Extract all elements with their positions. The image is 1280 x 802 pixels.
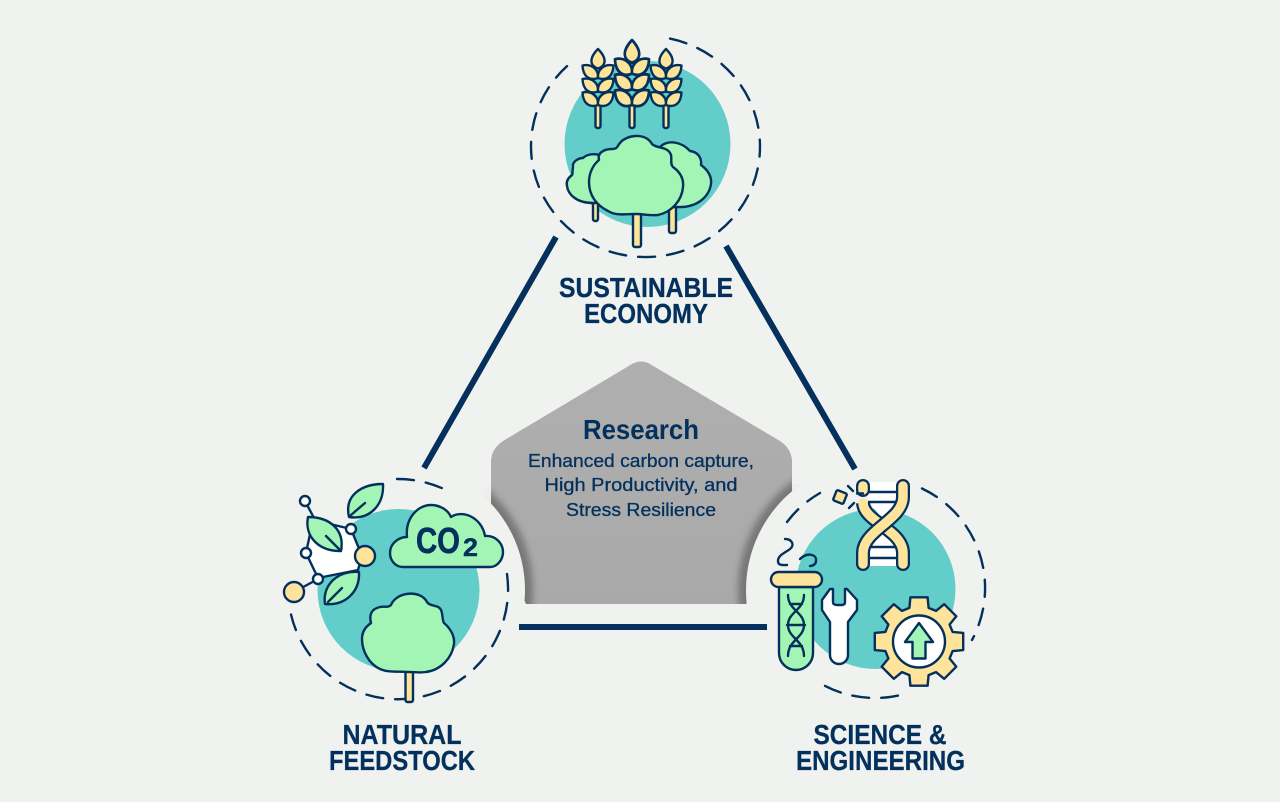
teal circle <box>564 61 730 227</box>
icon: CO2 cloud <box>390 505 503 567</box>
icon: wrench <box>822 589 857 664</box>
dashed ring <box>531 39 760 257</box>
dashed ring <box>787 488 985 698</box>
panel: sustainable economy icon <box>531 39 760 257</box>
faint halo shadows <box>267 457 1008 723</box>
panel: science and engineering icon <box>771 482 985 698</box>
research description line 3: Stress Resilience <box>566 500 716 520</box>
icon: wheat right <box>650 49 682 128</box>
label: natural feedstock <box>329 719 475 776</box>
central research pentagon <box>491 362 792 604</box>
icon: small square and sparks <box>833 486 863 508</box>
icon: wheat left <box>582 49 614 128</box>
label: natural feedstock: FEEDSTOCK <box>329 745 475 776</box>
label: sustainable economy <box>559 272 733 329</box>
icon: leaves <box>307 484 383 604</box>
line: sustainable economy to natural feedstock <box>424 237 556 468</box>
icon: DNA helix <box>863 482 903 566</box>
teal circle <box>318 509 480 671</box>
research description line 2: High Productivity, and <box>544 475 738 495</box>
icon: trees <box>567 136 711 247</box>
label: science and engineering: ENGINEERING <box>796 745 965 776</box>
teal circle <box>796 509 956 669</box>
line: natural feedstock to science and engineering <box>519 624 767 630</box>
icon: test tube <box>771 539 822 670</box>
label: natural feedstock: NATURAL <box>342 719 462 750</box>
label: science and engineering <box>796 719 965 776</box>
heading: research: Research <box>583 414 699 445</box>
icon: gear with up arrow <box>875 597 963 686</box>
infographic: research triangle <box>282 37 986 770</box>
research description line 1: Enhanced carbon capture, <box>528 451 754 471</box>
label: science and engineering: SCIENCE & <box>814 719 946 750</box>
icon: CO2 cloud: 2 <box>463 534 478 562</box>
research text block <box>528 414 754 520</box>
line: sustainable economy to science and engineering <box>726 246 855 469</box>
icon: CO2 cloud: CO <box>416 520 460 561</box>
panel: natural feedstock icon <box>284 479 508 702</box>
dashed ring <box>291 479 508 699</box>
icon: wheat centre <box>615 40 649 128</box>
icon: molecule <box>284 496 375 602</box>
label: sustainable economy: SUSTAINABLE <box>559 272 733 303</box>
label: sustainable economy: ECONOMY <box>584 298 708 329</box>
icon: tree <box>362 594 454 702</box>
